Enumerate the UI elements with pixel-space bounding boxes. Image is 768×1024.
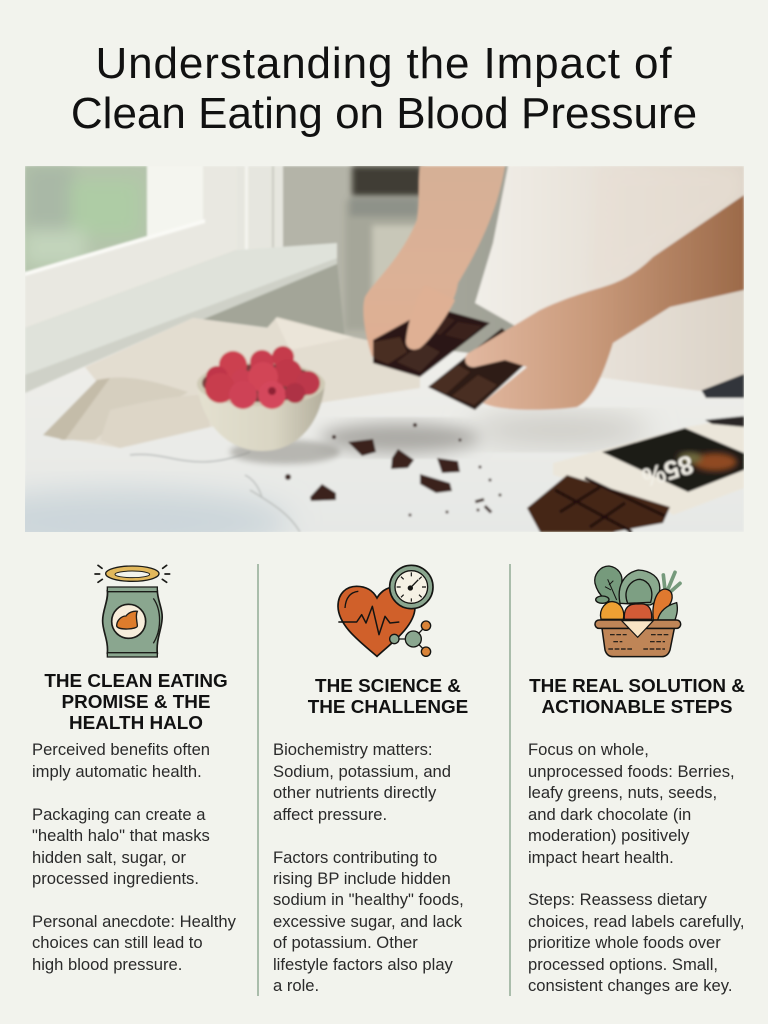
towel bbox=[43, 317, 420, 448]
body text: moderation) positively bbox=[528, 826, 689, 845]
body text: Steps: Reassess dietary bbox=[528, 890, 707, 909]
body text: Sodium, potassium, and bbox=[273, 762, 451, 781]
shirt bbox=[475, 166, 744, 398]
heading: THE SCIENCE & bbox=[315, 676, 461, 696]
body text: processed ingredients. bbox=[32, 869, 199, 888]
body text: a role. bbox=[273, 976, 319, 995]
icon: snack bag with halo bbox=[94, 564, 170, 658]
body text: Personal anecdote: Healthy bbox=[32, 912, 236, 931]
body text: consistent changes are key. bbox=[528, 976, 732, 995]
divider line, first and second columns bbox=[257, 564, 259, 996]
body text: imply automatic health. bbox=[32, 762, 202, 781]
body text: sodium in "healthy" foods, bbox=[273, 890, 464, 909]
body text bbox=[528, 740, 744, 995]
body text: hidden salt, sugar, or bbox=[32, 848, 186, 867]
body text: unprocessed foods: Berries, bbox=[528, 762, 735, 781]
body text: Perceived benefits often bbox=[32, 740, 210, 759]
heading: THE CHALLENGE bbox=[308, 696, 468, 718]
body text: high blood pressure. bbox=[32, 955, 182, 974]
heading: PROMISE & THE bbox=[61, 692, 211, 712]
title bbox=[71, 39, 697, 138]
heading bbox=[44, 670, 228, 734]
chocolate piece, left bbox=[373, 307, 490, 377]
body text: leafy greens, nuts, seeds, bbox=[528, 783, 717, 802]
icon: heart with gauge and molecule bbox=[337, 564, 434, 658]
chocolate piece, right bbox=[428, 328, 533, 410]
body text: lifestyle factors also play bbox=[273, 955, 453, 974]
body text: Biochemistry matters: bbox=[273, 740, 433, 759]
body text: Factors contributing to bbox=[273, 848, 437, 867]
body text: prioritize whole foods over bbox=[528, 933, 721, 952]
body text: affect pressure. bbox=[273, 805, 387, 824]
title: Understanding the Impact of bbox=[95, 39, 673, 88]
body text: Focus on whole, bbox=[528, 740, 649, 759]
photo: hands breaking dark chocolate beside a bowl of raspberries bbox=[25, 166, 744, 532]
heading: THE CLEAN EATING bbox=[44, 670, 228, 692]
chocolate package: 85% bbox=[638, 449, 697, 493]
chocolate crumbs bbox=[285, 423, 502, 516]
divider line, second and third columns bbox=[509, 564, 511, 996]
body text: choices, read labels carefully, bbox=[528, 912, 744, 931]
marble counter bbox=[0, 318, 744, 554]
body text: choices can still lead to bbox=[32, 933, 203, 952]
heading bbox=[308, 676, 468, 718]
body text: of potassium. Other bbox=[273, 933, 418, 952]
heading bbox=[529, 676, 745, 718]
body text bbox=[273, 740, 464, 995]
body text: other nutrients directly bbox=[273, 783, 436, 802]
body text: Packaging can create a bbox=[32, 805, 205, 824]
body text: excessive sugar, and lack bbox=[273, 912, 462, 931]
wall and window bbox=[25, 166, 744, 532]
panel: the science and the challenge bbox=[273, 564, 468, 995]
body text bbox=[32, 740, 236, 974]
body text: "health halo" that masks bbox=[32, 826, 210, 845]
title: Clean Eating on Blood Pressure bbox=[71, 89, 697, 138]
body text: impact heart health. bbox=[528, 848, 674, 867]
icon: basket of vegetables bbox=[594, 565, 682, 658]
body text: rising BP include hidden bbox=[273, 869, 451, 888]
left thumb bbox=[406, 285, 455, 350]
heading: THE REAL SOLUTION & bbox=[529, 676, 745, 696]
body text: processed options. Small, bbox=[528, 955, 718, 974]
panel: the real solution and actionable steps bbox=[528, 565, 745, 995]
chocolate package bbox=[527, 416, 744, 532]
body text: and dark chocolate (in bbox=[528, 805, 691, 824]
heading: HEALTH HALO bbox=[69, 712, 203, 734]
panel: the clean eating promise bbox=[32, 564, 236, 974]
left arm and hand bbox=[363, 166, 505, 357]
heading: ACTIONABLE STEPS bbox=[541, 696, 733, 718]
right arm and hand bbox=[465, 195, 744, 410]
bowl of raspberries bbox=[197, 346, 340, 464]
